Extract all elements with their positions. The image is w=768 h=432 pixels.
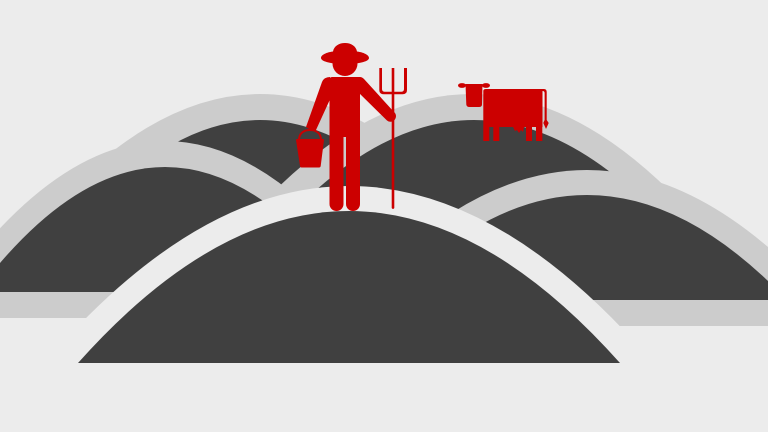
farmer right arm <box>356 77 396 122</box>
icon: cow <box>458 83 549 141</box>
farmer head <box>332 51 358 76</box>
pitchfork <box>379 68 407 209</box>
hill: front <box>49 186 649 363</box>
cow tail <box>542 89 549 129</box>
hill: back right <box>191 94 753 290</box>
farmer hat <box>321 43 369 64</box>
farmer body and legs <box>330 77 360 211</box>
hill: right <box>329 170 768 326</box>
cow head <box>458 83 490 107</box>
farmer left arm <box>306 77 332 130</box>
bucket <box>296 130 324 168</box>
cow body <box>483 89 542 141</box>
hill: back centre <box>0 94 532 290</box>
icon: farmer <box>296 43 407 211</box>
hill: left <box>0 141 400 318</box>
